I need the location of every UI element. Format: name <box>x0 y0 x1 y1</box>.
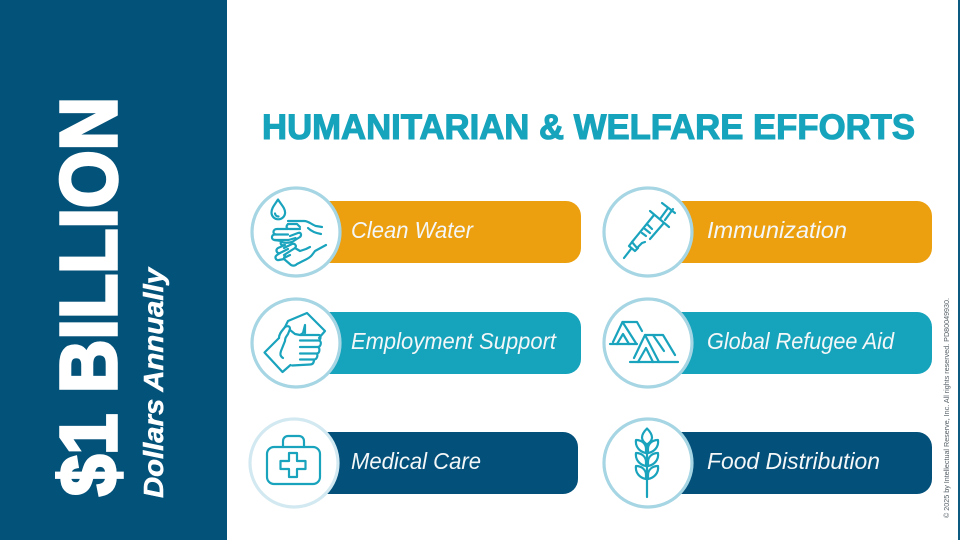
item: Food Distribution: Food Distribution <box>707 448 880 474</box>
item: Employment Support <box>252 299 581 387</box>
item: Global Refugee Aid: Global Refugee Aid <box>707 328 895 354</box>
item: Medical Care <box>250 419 578 507</box>
item: Global Refugee Aid <box>604 299 932 387</box>
title: HUMANITARIAN & WELFARE EFFORTS <box>262 108 915 147</box>
copyright note: © 2025 by Intellectual Reserve, Inc. All rights reserved. PD80049930. <box>943 298 951 518</box>
item: Employment Support: Employment Support <box>351 328 558 354</box>
item: Clean Water <box>252 188 581 276</box>
icon: first aid kit <box>267 436 320 484</box>
icon: wheat <box>636 428 658 497</box>
item: Clean Water: Clean Water <box>351 217 474 243</box>
item: Immunization <box>604 188 932 276</box>
icon: syringe <box>624 203 675 258</box>
icon: refugee tents <box>610 322 678 362</box>
panel: left statistic <box>0 0 227 540</box>
item: Food Distribution <box>604 419 932 507</box>
icon: washing hands <box>272 200 326 266</box>
item: Immunization: Immunization <box>707 217 847 243</box>
subheading: Dollars Annually: Dollars Annually <box>138 267 169 498</box>
big number: $1 Billion: $1 BILLION <box>44 97 133 496</box>
item: Medical Care: Medical Care <box>351 448 481 474</box>
icon: hand holding money <box>264 313 325 372</box>
